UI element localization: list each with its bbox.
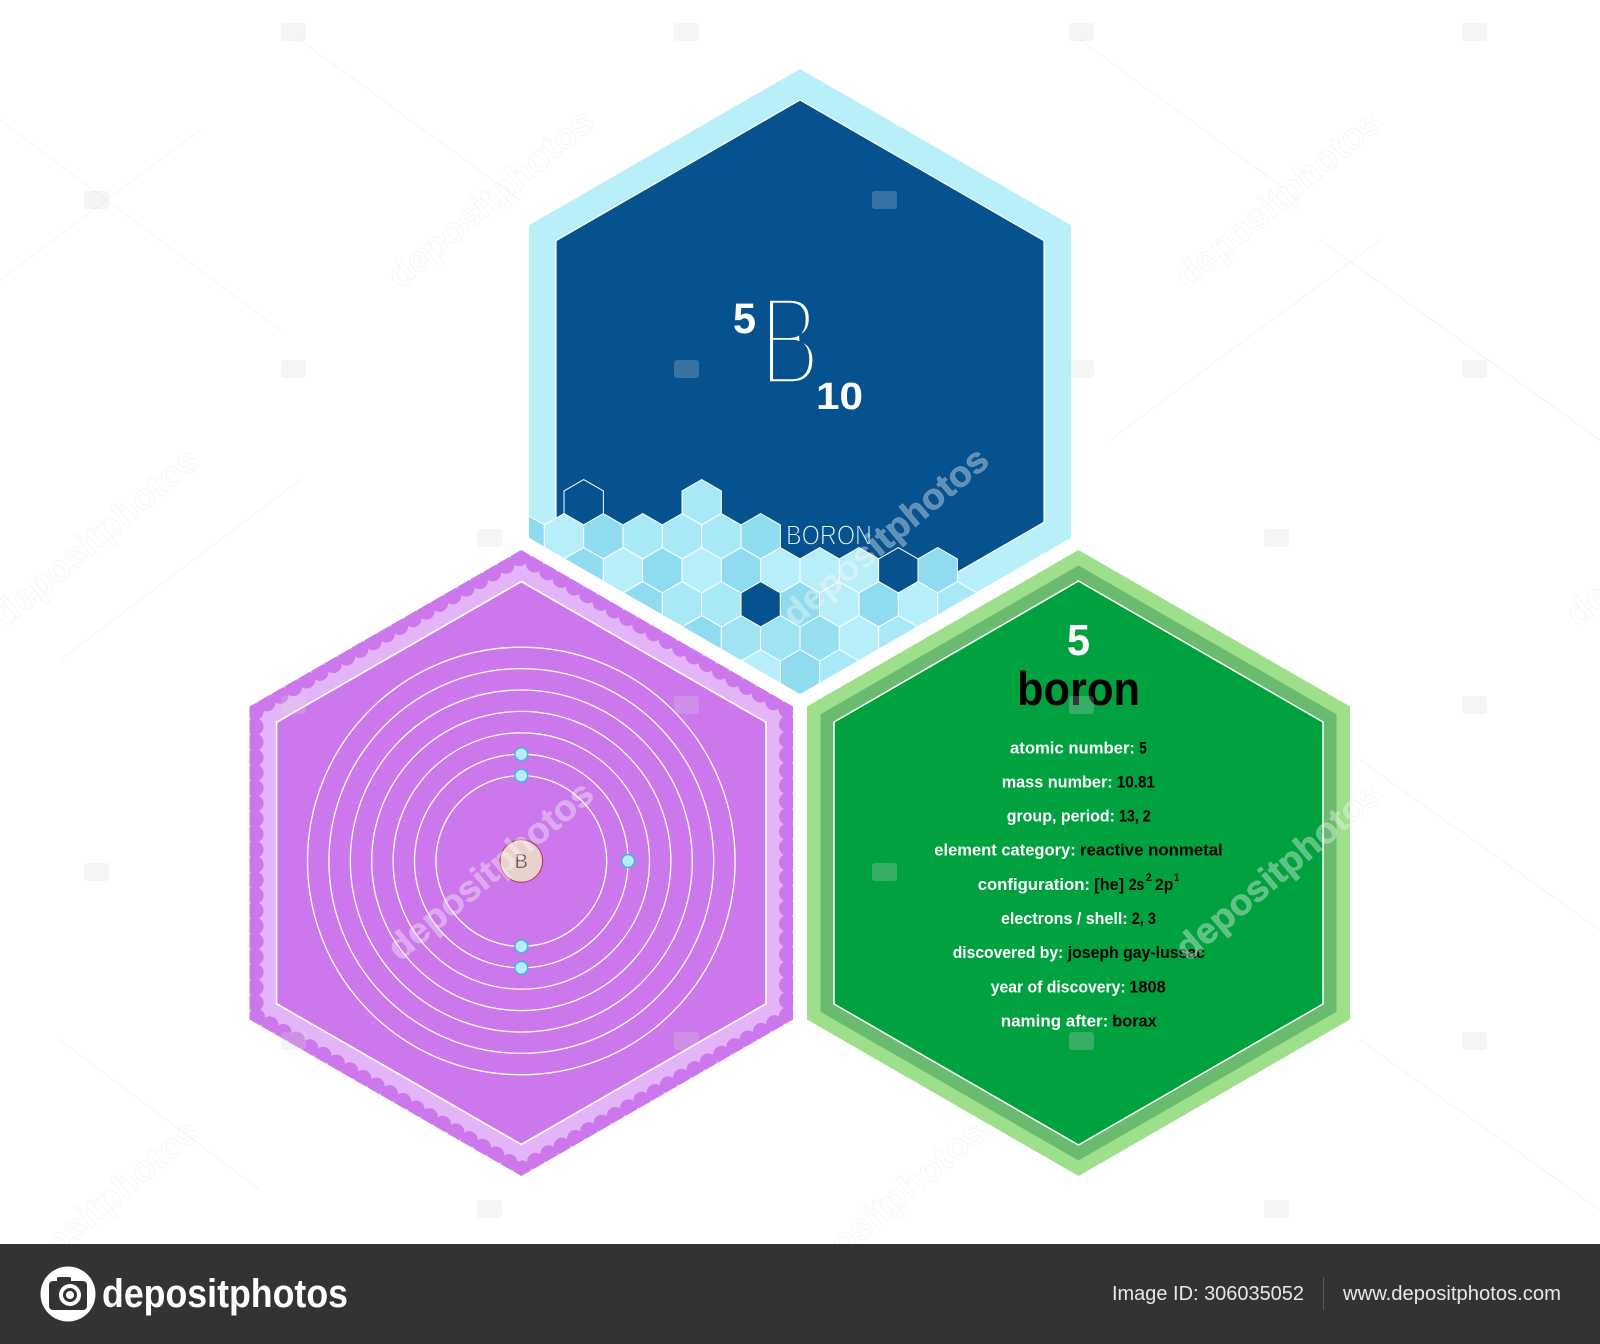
panel: atom shell diagram hexagon (250, 550, 793, 1176)
watermark overlay: depositphotos (379, 100, 601, 296)
properties list: [he] (1094, 875, 1124, 894)
properties list: naming after: (1001, 1012, 1108, 1031)
watermark overlay: depositphotos (379, 772, 601, 968)
outer light green border (807, 550, 1350, 1176)
properties list: configuration: (978, 875, 1090, 894)
hexagon outer border (529, 69, 1071, 694)
light purple border (250, 550, 793, 1176)
honeycomb cells (505, 480, 977, 695)
properties list: joseph gay-lussac (1067, 943, 1205, 962)
properties list: 1 (1174, 872, 1179, 884)
inner green field (834, 581, 1323, 1145)
hexagon inner navy field (556, 100, 1044, 663)
watermark overlay: depositphotos (771, 1110, 993, 1306)
electron shell orbits (308, 647, 735, 1075)
properties list: 13, 2 (1119, 807, 1151, 826)
properties list: year of discovery: (991, 977, 1126, 996)
properties list: reactive nonmetal (1080, 841, 1223, 860)
properties list (934, 738, 1223, 1031)
properties list: atomic number: (1010, 738, 1135, 757)
properties list: 2s (1129, 875, 1144, 894)
properties list: 1808 (1129, 977, 1166, 996)
properties list: 10.81 (1117, 772, 1155, 792)
properties list: element category: (934, 841, 1076, 860)
properties list: borax (1112, 1012, 1157, 1031)
image id: Image ID: 306035052 (1112, 1283, 1304, 1305)
atomic number superscript: 5 (733, 295, 756, 343)
element name heading: boron (1017, 662, 1140, 715)
middle green border (820, 566, 1336, 1160)
properties list: 2 (1146, 872, 1152, 884)
properties list: group, period: (1007, 807, 1115, 826)
properties list: 2p (1155, 875, 1173, 894)
properties list: discovered by: (953, 943, 1063, 962)
element symbol B: B (760, 270, 820, 413)
nucleus with symbol: B (515, 851, 528, 873)
atomic number heading: 5 (1067, 616, 1090, 665)
footer bar (0, 1244, 1600, 1344)
properties list: 5 (1139, 738, 1147, 757)
electrons (515, 748, 634, 974)
watermark overlay: depositphotos (1167, 100, 1389, 296)
website url: www.depositphotos.com (1342, 1283, 1561, 1305)
watermark overlay: depositphotos (1167, 772, 1389, 968)
watermark overlay: depositphotos (774, 438, 996, 634)
scalloped border edge (255, 556, 788, 1170)
properties list: 2, 3 (1132, 909, 1156, 928)
purple inner field (277, 582, 766, 1144)
panel: element symbol hexagon (505, 69, 1071, 695)
mass number subscript: 10 (816, 376, 863, 418)
properties list: mass number: (1002, 772, 1113, 792)
properties list: electrons / shell: (1001, 909, 1128, 928)
panel: element properties hexagon (807, 550, 1350, 1176)
brand name: depositphotos (102, 1272, 348, 1316)
icon: camera logo (40, 1266, 96, 1322)
nucleus with symbol (500, 840, 543, 882)
element name label: BORON (786, 520, 872, 550)
